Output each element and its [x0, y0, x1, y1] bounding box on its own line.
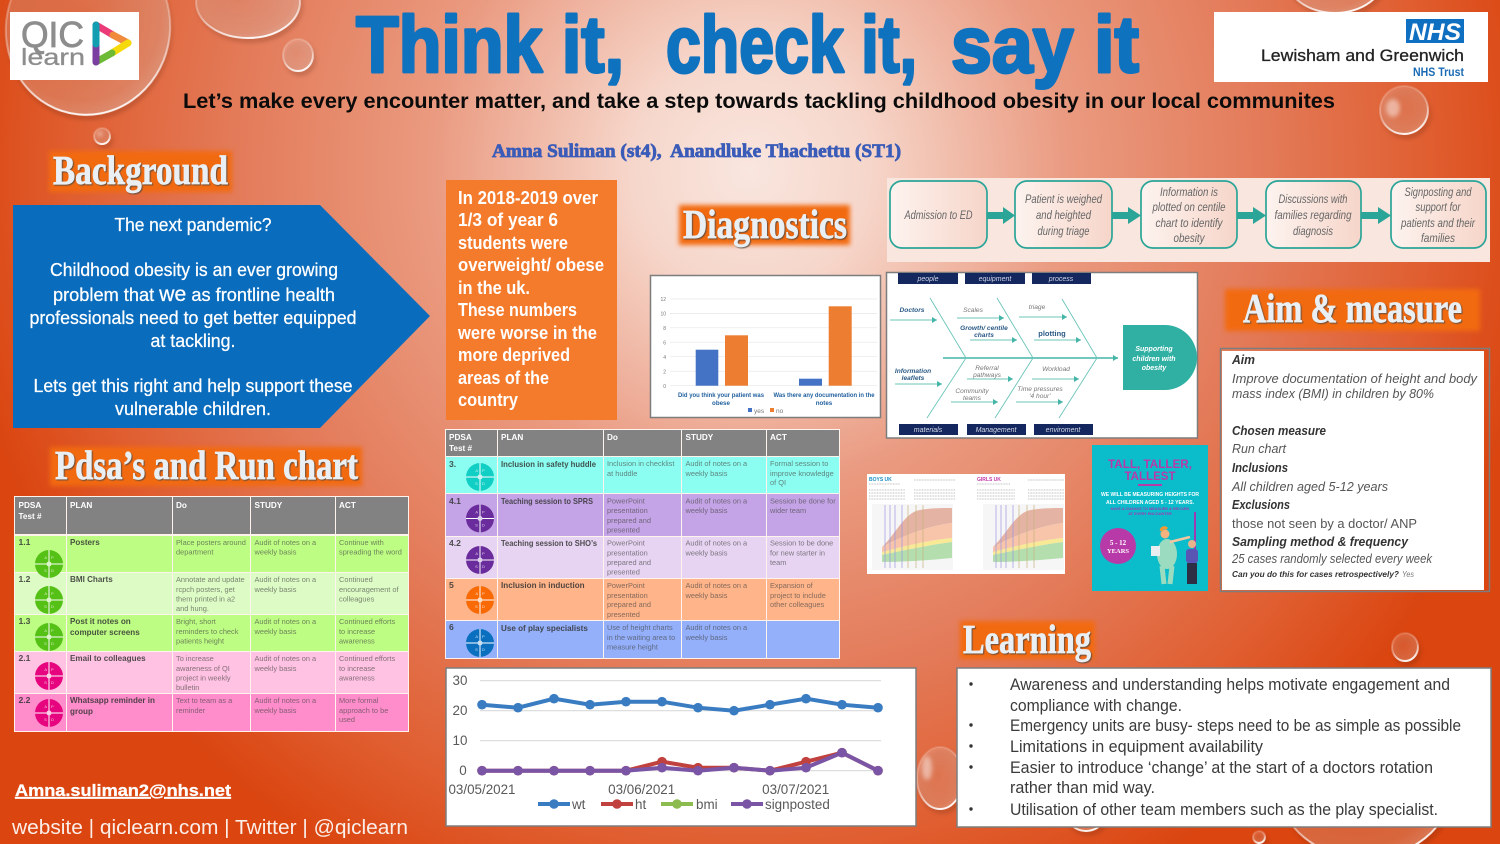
NHS logo: NHS Trust: [1413, 67, 1464, 79]
table: PDSA cycles 3 to 6: Teaching session to SPRS: [501, 497, 594, 506]
contact email: Amna.suliman2@nhs.net: [15, 781, 231, 800]
centile growth charts: [867, 474, 1065, 574]
panel: patient pathway flow: Admission to ED: [904, 208, 973, 222]
panel: aim and measure: Exclusions: [1232, 498, 1290, 512]
fishbone diagram: people: [916, 276, 939, 283]
heading: Background: Background: [53, 147, 228, 193]
panel: statistics callout: [446, 180, 617, 420]
panel: patient pathway flow: [887, 178, 1490, 262]
run chart: 10: [453, 733, 467, 748]
table: PDSA cycles 3 to 6: 5: [449, 580, 454, 590]
table: PDSA cycles 1 and 2: Posters: [70, 538, 100, 547]
table: PDSA cycles 3 to 6: other colleagues: [770, 600, 825, 609]
panel: background arrow: The next pandemic?: [114, 215, 272, 235]
panel: learning points: Emergency units are busy- steps need to be as simple as possible: [1010, 717, 1461, 735]
table: PDSA cycles 3 to 6: Inclusion in safety huddle: [501, 460, 596, 469]
panel: learning points: Limitations in equipment availability: [1010, 738, 1264, 756]
table: PDSA cycles 3 to 6: [445, 429, 840, 659]
panel: statistics callout: students were: [458, 233, 568, 253]
panel: statistics callout: In 2018-2019 over: [458, 188, 598, 208]
panel: aim and measure: Chosen measure: [1232, 424, 1326, 438]
panel: statistics callout: overweight/ obese: [458, 255, 604, 275]
bar chart: diagnostics survey: notes: [816, 400, 833, 407]
fishbone diagram: Referral: [975, 365, 999, 372]
panel: patient pathway flow: during triage: [1038, 224, 1090, 238]
poster: tall taller tallest: 5 - 12: [1110, 539, 1127, 547]
panel: aim and measure: Inclusions: [1232, 461, 1288, 475]
centile growth charts: BOYS UK: [869, 477, 892, 483]
authors: Amna Suliman (st4), Anandluke Thachettu (ST1): [492, 141, 901, 162]
fishbone diagram: Management: [976, 427, 1017, 434]
table: PDSA cycles 3 to 6: in the waiting area to: [607, 633, 675, 642]
bar chart: diagnostics survey: 10: [660, 312, 666, 318]
panel: background arrow: Childhood obesity is an ever growing: [50, 260, 338, 280]
table: PDSA cycles 3 to 6: of QI: [770, 478, 786, 487]
bar chart: diagnostics survey: yes: [754, 408, 765, 415]
table: PDSA cycles 1 and 2: 1.2: [18, 574, 31, 584]
panel: aim and measure: Run chart: [1232, 442, 1287, 456]
table: PDSA cycles 1 and 2: 2.1: [18, 653, 31, 663]
table: PDSA cycles 1 and 2: department: [176, 548, 213, 556]
panel: aim and measure: Sampling method & frequency: [1232, 535, 1409, 549]
icon: PDSA wheel 1.1: [35, 550, 63, 578]
table: PDSA cycles 1 and 2: Audit of notes on a: [254, 696, 317, 705]
fishbone diagram: enviroment: [1046, 427, 1081, 434]
table: PDSA cycles 3 to 6: STUDY: [686, 433, 714, 442]
table: PDSA cycles 1 and 2: Text to team as a: [176, 696, 233, 705]
table: PDSA cycles 3 to 6: presentation: [607, 549, 648, 558]
fishbone diagram: triage: [1029, 304, 1046, 311]
table: PDSA cycles 1 and 2: awareness of QI: [176, 664, 230, 673]
icon: PDSA wheel 2.2: A P: [44, 704, 54, 709]
run chart: 03/05/2021: [448, 782, 516, 797]
fishbone diagram: children with: [1132, 356, 1176, 363]
panel: aim and measure: All children aged 5-12 years: [1231, 480, 1388, 494]
bar chart: diagnostics survey: obese: [712, 400, 730, 407]
table: PDSA cycles 1 and 2: Email to colleagues: [70, 654, 146, 663]
panel: learning points: [957, 668, 1491, 827]
table: PDSA cycles 1 and 2: awareness: [339, 636, 375, 646]
icon: PDSA wheel 1.2: A P: [44, 591, 54, 596]
panel: statistics callout: areas of the: [458, 368, 549, 388]
icon: PDSA wheel 1.3: S D: [44, 641, 54, 646]
bar chart: diagnostics survey: no: [776, 408, 784, 415]
panel: statistics callout: country: [458, 390, 518, 410]
table: PDSA cycles 1 and 2: weekly basis: [254, 706, 297, 715]
table: PDSA cycles 3 to 6: presented: [607, 610, 640, 619]
panel: learning points: compliance with change.: [1010, 697, 1182, 715]
table: PDSA cycles 1 and 2: to increase: [339, 627, 375, 636]
icon: PDSA wheel 2.1: [35, 662, 63, 690]
heading: Diagnostics: Diagnostics: [683, 201, 847, 247]
table: PDSA cycles 3 to 6: Use of play specialists: [501, 624, 588, 633]
icon: PDSA wheel 3: A P: [475, 468, 485, 473]
run chart: signposted: [765, 797, 830, 812]
table: PDSA cycles 3 to 6: Use of height charts: [607, 623, 673, 632]
fishbone diagram: [886, 272, 1198, 438]
table: PDSA cycles 3 to 6: PDSA: [449, 433, 472, 442]
table: PDSA cycles 1 and 2: 1.3: [18, 616, 31, 626]
fishbone diagram: Growth/ centile: [960, 325, 1008, 332]
panel: statistics callout: were worse in the: [457, 323, 597, 343]
run chart: bmi: [696, 797, 718, 812]
panel: background arrow: vulnerable children.: [115, 399, 271, 419]
table: PDSA cycles 1 and 2: them printed in a2: [176, 594, 235, 604]
icon: PDSA wheel 6: [466, 629, 494, 657]
bar chart: diagnostics survey: 0: [663, 384, 666, 390]
table: PDSA cycles 1 and 2: weekly basis: [254, 627, 297, 636]
fishbone diagram: process: [1048, 276, 1074, 283]
fishbone diagram: Community: [955, 388, 989, 395]
title: [356, 0, 1139, 89]
bar chart: diagnostics survey: Did you think your patient was: [678, 392, 765, 399]
table: PDSA cycles 3 to 6: weekly basis: [684, 591, 728, 600]
table: PDSA cycles 3 to 6: Do: [607, 433, 618, 442]
icon: PDSA wheel 5: A P: [475, 591, 485, 596]
fishbone diagram: obesity: [1142, 365, 1167, 372]
table: PDSA cycles 1 and 2: encouragement of: [339, 585, 400, 594]
panel: patient pathway flow: Information is: [1160, 185, 1218, 199]
fishbone diagram: Supporting: [1135, 346, 1173, 353]
heading: Learning: Learning: [963, 616, 1091, 662]
panel: statistics callout: in the uk.: [458, 278, 530, 298]
footer links: website | qiclearn.com | Twitter | @qiclearn: [11, 817, 408, 839]
fishbone diagram: Information: [895, 368, 931, 375]
panel: learning points: Easier to introduce ‘change’ at the start of a doctors rotation: [1010, 759, 1433, 777]
fishbone diagram: materials: [914, 427, 943, 434]
table: PDSA cycles 3 to 6: 4.2: [449, 538, 461, 548]
run chart: 30: [453, 673, 467, 688]
bar chart: diagnostics survey: [650, 276, 880, 418]
run chart: [446, 668, 916, 826]
table: PDSA cycles 3 to 6: team: [770, 558, 786, 567]
icon: PDSA wheel 1.2: S D: [44, 604, 54, 609]
fishbone diagram: plotting: [1038, 329, 1066, 338]
panel: patient pathway flow: patients and their: [1400, 216, 1476, 230]
run chart: 0: [459, 763, 467, 778]
title: say it: [951, 0, 1139, 89]
table: PDSA cycles 1 and 2: More formal: [339, 696, 379, 705]
table: PDSA cycles 1 and 2: BMI Charts: [70, 575, 113, 584]
icon: PDSA wheel 6: S D: [475, 647, 485, 652]
table: PDSA cycles 1 and 2: used: [339, 715, 355, 724]
icon: PDSA wheel 4.2: [466, 546, 494, 574]
panel: aim and measure: [1220, 348, 1490, 592]
panel: statistics callout: more deprived: [458, 345, 570, 365]
table: PDSA cycles 3 to 6: Inclusion in checklist: [607, 459, 674, 468]
panel: patient pathway flow: plotted on centile: [1152, 200, 1226, 214]
table: PDSA cycles 3 to 6: weekly basis: [684, 549, 728, 558]
panel: aim and measure: Improve documentation of height and body: [1232, 372, 1478, 386]
poster: tall taller tallest: YEARS: [1107, 548, 1129, 555]
run chart: 03/07/2021: [762, 782, 829, 797]
panel: aim and measure: Aim: [1231, 353, 1255, 367]
poster: tall taller tallest: WE WILL BE MEASURING HEIGHTS FOR: [1101, 492, 1199, 498]
table: PDSA cycles 3 to 6: Inclusion in induction: [501, 581, 585, 590]
panel: aim and measure: Can you do this for cases retrospectively?: [1232, 569, 1400, 579]
table: PDSA cycles 3 to 6: 4.1: [449, 496, 461, 506]
table: PDSA cycles 3 to 6: PowerPoint: [607, 539, 645, 548]
table: PDSA cycles 1 and 2: Audit of notes on a: [254, 617, 317, 626]
table: PDSA cycles 3 to 6: presented: [607, 568, 640, 577]
icon: PDSA wheel 2.2: [35, 699, 63, 727]
table: PDSA cycles 3 to 6: presentation: [607, 506, 648, 515]
table: PDSA cycles 3 to 6: measure height: [607, 643, 658, 652]
QIC learn logo: learn: [21, 44, 85, 70]
poster: tall taller tallest: HAVE A CHANCE TO MEASURE & RECORD: [1111, 507, 1190, 511]
table: PDSA cycles 1 and 2: rcpch posters, get: [176, 585, 235, 594]
table: PDSA cycles 1 and 2: Do: [176, 501, 187, 510]
table: PDSA cycles 1 and 2: Bright, short: [176, 617, 216, 626]
table: PDSA cycles 3 to 6: Session to be done: [770, 539, 833, 548]
icon: PDSA wheel 1.1: S D: [44, 568, 54, 573]
title: Think it,: [356, 0, 624, 89]
table: PDSA cycles 3 to 6: weekly basis: [684, 506, 728, 515]
table: PDSA cycles 3 to 6: prepared and: [607, 516, 651, 525]
poster: tall taller tallest: AT EVERY ENCOUNTER: [1128, 512, 1172, 516]
table: PDSA cycles 3 to 6: weekly basis: [684, 633, 728, 642]
panel: patient pathway flow: families regarding: [1274, 208, 1352, 222]
table: PDSA cycles 3 to 6: 3.: [449, 459, 456, 469]
panel: background arrow: professionals need to get better equipped: [30, 308, 356, 328]
QIC learn logo: QIC: [21, 14, 84, 55]
title: check it,: [666, 0, 917, 89]
table: PDSA cycles 1 and 2: PDSA: [18, 501, 41, 510]
poster: tall taller tallest: [1092, 445, 1208, 591]
table: PDSA cycles 1 and 2: [14, 496, 409, 732]
table: PDSA cycles 3 to 6: prepared and: [607, 600, 651, 609]
table: PDSA cycles 1 and 2: weekly basis: [254, 664, 297, 673]
table: PDSA cycles 3 to 6: wider team: [769, 506, 806, 515]
table: PDSA cycles 3 to 6: at huddle: [607, 469, 637, 478]
panel: background arrow: [13, 205, 430, 428]
icon: PDSA wheel 5: [466, 586, 494, 614]
table: PDSA cycles 3 to 6: weekly basis: [684, 469, 728, 478]
table: PDSA cycles 1 and 2: group: [70, 707, 93, 716]
icon: PDSA wheel 6: A P: [475, 634, 485, 639]
centile growth charts: GIRLS UK: [977, 477, 1001, 483]
table: PDSA cycles 3 to 6: prepared and: [607, 558, 651, 567]
icon: PDSA wheel 1.3: A P: [44, 628, 54, 633]
panel: patient pathway flow: Signposting and: [1404, 185, 1472, 199]
icon: PDSA wheel 4.1: S D: [475, 522, 485, 528]
poster: tall taller tallest: TALL, TALLER,: [1108, 457, 1192, 471]
table: PDSA cycles 1 and 2: PLAN: [70, 501, 92, 510]
table: PDSA cycles 1 and 2: project in weekly: [176, 674, 231, 682]
table: PDSA cycles 3 to 6: project to include: [770, 591, 826, 600]
run chart: wt: [571, 797, 586, 812]
table: PDSA cycles 1 and 2: colleagues: [339, 594, 375, 604]
fishbone diagram: pathways: [972, 372, 1002, 379]
panel: statistics callout: 1/3 of year 6: [458, 210, 558, 230]
bar chart: diagnostics survey: 6: [663, 340, 666, 346]
fishbone diagram: ‘4 hour’: [1029, 393, 1051, 400]
icon: PDSA wheel 3: [466, 463, 494, 491]
table: PDSA cycles 3 to 6: Audit of notes on a: [686, 459, 748, 468]
panel: patient pathway flow: support for: [1416, 200, 1461, 214]
table: PDSA cycles 3 to 6: PLAN: [501, 433, 523, 442]
table: PDSA cycles 3 to 6: Audit of notes on a: [686, 623, 748, 632]
table: PDSA cycles 3 to 6: for new starter in: [770, 549, 825, 558]
panel: learning points: Awareness and understanding helps motivate engagement and: [1010, 676, 1450, 694]
icon: PDSA wheel 1.1: A P: [44, 555, 54, 560]
panel: background arrow: at tackling.: [150, 331, 236, 351]
icon: PDSA wheel 4.1: [466, 504, 494, 532]
fishbone diagram: Time pressures: [1017, 386, 1063, 393]
fishbone diagram: Doctors: [900, 307, 925, 314]
table: PDSA cycles 3 to 6: Formal session to: [770, 459, 828, 468]
run chart: 03/06/2021: [608, 782, 675, 797]
table: PDSA cycles 1 and 2: Continued efforts: [339, 654, 395, 663]
fishbone diagram: charts: [974, 332, 994, 339]
icon: PDSA wheel 1.2: [35, 586, 63, 614]
table: PDSA cycles 1 and 2: ACT: [339, 501, 356, 510]
NHS logo: Lewisham and Greenwich: [1261, 46, 1464, 65]
panel: background arrow: problem that we as frontline health: [53, 283, 335, 306]
table: PDSA cycles 1 and 2: Place posters around: [176, 538, 246, 547]
table: PDSA cycles 1 and 2: 2.2: [18, 695, 31, 705]
icon: PDSA wheel 4.2: A P: [475, 551, 485, 556]
table: PDSA cycles 3 to 6: presented: [607, 526, 640, 535]
icon: PDSA wheel 3: S D: [475, 481, 485, 486]
icon: PDSA wheel 2.2: S D: [44, 717, 54, 722]
table: PDSA cycles 1 and 2: reminders to check: [176, 627, 239, 636]
table: PDSA cycles 1 and 2: Post it notes on: [70, 617, 131, 626]
table: PDSA cycles 1 and 2: patients height: [176, 636, 224, 646]
panel: aim and measure: mass index (BMI) in children by 80%: [1232, 387, 1434, 401]
fishbone diagram: Scales: [963, 307, 984, 314]
run chart: 20: [453, 703, 467, 718]
table: PDSA cycles 1 and 2: weekly basis: [254, 585, 297, 594]
panel: patient pathway flow: Patient is weighed: [1025, 192, 1102, 206]
table: PDSA cycles 1 and 2: Continued: [339, 575, 373, 584]
fishbone diagram: Workload: [1042, 366, 1070, 373]
table: PDSA cycles 1 and 2: Audit of notes on a: [254, 538, 317, 547]
poster: tall taller tallest: ALL CHILDREN AGED 5 - 12 YEARS.: [1106, 500, 1195, 506]
table: PDSA cycles 3 to 6: Audit of notes on a: [686, 497, 748, 506]
table: PDSA cycles 1 and 2: Continue with: [339, 538, 384, 547]
icon: PDSA wheel 4.2: S D: [475, 564, 485, 569]
table: PDSA cycles 1 and 2: Audit of notes on a: [254, 575, 317, 584]
table: PDSA cycles 1 and 2: awareness: [339, 674, 375, 682]
NHS logo: NHS: [1409, 19, 1461, 46]
table: PDSA cycles 3 to 6: PowerPoint: [607, 497, 645, 506]
table: PDSA cycles 3 to 6: PowerPoint: [607, 581, 645, 590]
QIC learn logo: [10, 12, 139, 80]
table: PDSA cycles 1 and 2: Annotate and update: [176, 575, 245, 584]
table: PDSA cycles 3 to 6: Audit of notes on a: [686, 581, 748, 590]
table: PDSA cycles 1 and 2: reminder: [176, 706, 206, 715]
table: PDSA cycles 1 and 2: approach to be: [339, 706, 388, 715]
bar chart: diagnostics survey: 8: [663, 326, 666, 332]
table: PDSA cycles 1 and 2: Whatsapp reminder in: [70, 696, 155, 705]
table: PDSA cycles 3 to 6: Teaching session to SHO’s: [501, 539, 597, 548]
table: PDSA cycles 1 and 2: weekly basis: [254, 548, 297, 556]
panel: statistics callout: These numbers: [458, 300, 577, 320]
table: PDSA cycles 3 to 6: ACT: [770, 433, 787, 442]
panel: patient pathway flow: obesity: [1174, 231, 1205, 245]
fishbone diagram: leaflets: [902, 375, 925, 382]
table: PDSA cycles 3 to 6: improve knowledge: [770, 469, 834, 478]
table: PDSA cycles 1 and 2: and hung.: [176, 604, 209, 613]
panel: learning points: rather than mid way.: [1010, 779, 1155, 797]
table: PDSA cycles 1 and 2: 1.1: [18, 537, 31, 547]
table: PDSA cycles 3 to 6: 6: [449, 622, 454, 632]
icon: PDSA wheel 2.1: A P: [44, 667, 54, 672]
panel: patient pathway flow: chart to identify: [1156, 216, 1223, 230]
table: PDSA cycles 3 to 6: Session be done for: [770, 497, 836, 506]
panel: aim and measure: those not seen by a doctor/ ANP: [1232, 517, 1417, 531]
panel: patient pathway flow: and heighted: [1036, 208, 1091, 222]
table: PDSA cycles 3 to 6: Test #: [449, 444, 473, 453]
bar chart: diagnostics survey: 2: [663, 370, 666, 376]
table: PDSA cycles 1 and 2: Test #: [18, 512, 42, 521]
panel: patient pathway flow: diagnosis: [1293, 224, 1333, 238]
icon: PDSA wheel 5: S D: [475, 604, 485, 609]
table: PDSA cycles 3 to 6: Audit of notes on a: [686, 539, 748, 548]
table: PDSA cycles 1 and 2: To increase: [176, 654, 214, 663]
bar chart: diagnostics survey: 4: [663, 355, 666, 361]
table: PDSA cycles 1 and 2: bulletin: [176, 683, 199, 692]
table: PDSA cycles 3 to 6: presentation: [607, 591, 648, 600]
table: PDSA cycles 1 and 2: spreading the word: [339, 548, 402, 556]
fishbone diagram: teams: [963, 395, 982, 402]
icon: PDSA wheel 2.1: S D: [44, 680, 54, 685]
panel: patient pathway flow: Discussions with: [1278, 192, 1348, 206]
table: PDSA cycles 1 and 2: computer screens: [70, 628, 140, 637]
panel: background arrow: Lets get this right and help support these: [34, 376, 352, 396]
run chart: ht: [635, 797, 646, 812]
poster: tall taller tallest: TALLEST: [1124, 469, 1176, 483]
icon: PDSA wheel 4.1: A P: [475, 510, 485, 514]
icon: PDSA wheel 1.3: [35, 623, 63, 651]
NHS logo: [1214, 12, 1488, 82]
panel: patient pathway flow: families: [1421, 231, 1455, 245]
heading: PDSA and run chart: Pdsa’s and Run chart: [55, 442, 358, 488]
panel: aim and measure: 25 cases randomly selected every week: [1231, 552, 1433, 566]
fishbone diagram: equipment: [979, 276, 1012, 283]
table: PDSA cycles 1 and 2: Continued efforts: [339, 617, 395, 626]
table: PDSA cycles 1 and 2: Audit of notes on a: [254, 654, 317, 663]
subtitle: Let’s make every encounter matter, and take a step towards tackling childhood obesity in our local communites: [183, 90, 1335, 113]
table: PDSA cycles 3 to 6: Expansion of: [770, 581, 814, 590]
panel: learning points: Utilisation of other team members such as the play specialist.: [1010, 801, 1438, 819]
table: PDSA cycles 1 and 2: STUDY: [254, 501, 283, 510]
bar chart: diagnostics survey: Was there any documentation in the: [774, 392, 875, 399]
panel: aim and measure: Yes: [1402, 569, 1415, 579]
bar chart: diagnostics survey: 12: [660, 297, 666, 303]
table: PDSA cycles 1 and 2: to increase: [339, 664, 375, 673]
